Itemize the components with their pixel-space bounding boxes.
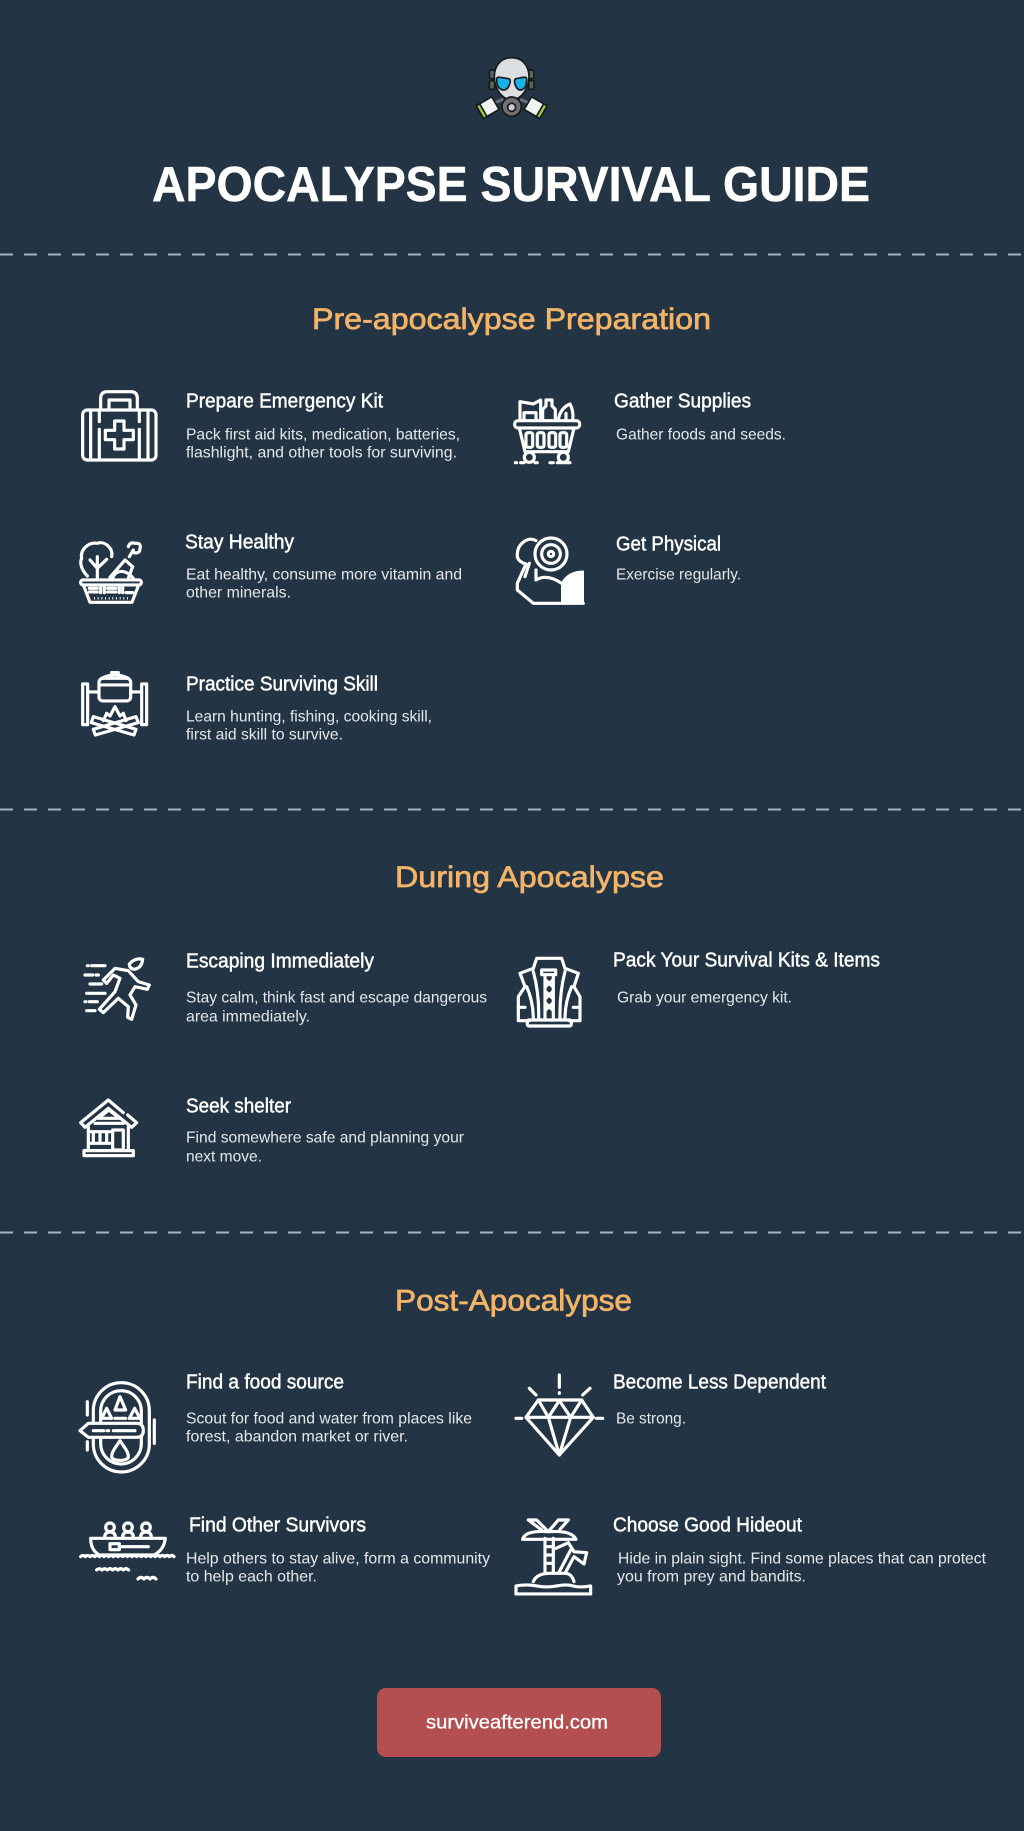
heading: Seek shelter bbox=[186, 1096, 291, 1118]
text: next move. bbox=[186, 1148, 262, 1166]
text bbox=[186, 990, 487, 1026]
icon: diamond bbox=[516, 1375, 603, 1455]
heading: Find a food source bbox=[186, 1372, 344, 1394]
text: Gather foods and seeds. bbox=[616, 426, 786, 444]
text: Eat healthy, consume more vitamin and bbox=[186, 566, 462, 584]
heading: Pack Your Survival Kits & Items bbox=[613, 950, 880, 972]
text bbox=[186, 566, 462, 602]
item: become less dependent bbox=[516, 1372, 826, 1455]
text: Grab your emergency kit. bbox=[617, 990, 792, 1006]
item: stay healthy bbox=[81, 532, 462, 602]
text: first aid skill to survive. bbox=[186, 726, 343, 744]
text: forest, abandon market or river. bbox=[186, 1428, 408, 1446]
icon: gas mask bbox=[476, 58, 547, 119]
panel: post-apocalypse bbox=[80, 1284, 987, 1594]
text: Help others to stay alive, form a community bbox=[186, 1550, 490, 1568]
panel: pre-apocalypse preparation bbox=[81, 303, 786, 744]
item: find a food source bbox=[80, 1372, 472, 1472]
icon: palm island bbox=[516, 1520, 591, 1594]
item: escaping immediately bbox=[85, 950, 487, 1026]
icon: boat with survivors bbox=[81, 1523, 174, 1579]
heading: Choose Good Hideout bbox=[613, 1514, 802, 1536]
panel: during apocalypse bbox=[81, 861, 880, 1166]
button: website link: surviveafterend.com bbox=[426, 1712, 608, 1734]
item: seek shelter bbox=[81, 1096, 464, 1166]
text: you from prey and bandits. bbox=[617, 1568, 806, 1586]
text: Be strong. bbox=[616, 1410, 686, 1428]
icon: first aid kit bbox=[83, 392, 156, 460]
section heading: Pre-apocalypse Preparation bbox=[312, 303, 711, 336]
heading: Practice Surviving Skill bbox=[186, 674, 378, 696]
text: Learn hunting, fishing, cooking skill, bbox=[186, 708, 432, 726]
item: practice surviving skill bbox=[83, 673, 432, 744]
section heading: Post-Apocalypse bbox=[395, 1284, 632, 1318]
heading: Prepare Emergency Kit bbox=[186, 390, 383, 412]
text: Stay calm, think fast and escape dangerous bbox=[186, 990, 487, 1006]
heading: Find Other Survivors bbox=[189, 1514, 366, 1536]
text: to help each other. bbox=[186, 1568, 317, 1586]
text bbox=[186, 1550, 490, 1586]
icon: shopping basket bbox=[515, 400, 580, 463]
section heading: During Apocalypse bbox=[395, 861, 664, 894]
item: choose good hideout bbox=[516, 1514, 987, 1594]
text bbox=[186, 708, 432, 744]
item: get physical bbox=[517, 534, 741, 604]
item: gather supplies bbox=[515, 390, 786, 463]
heading: Stay Healthy bbox=[185, 532, 294, 554]
text: Pack first aid kits, medication, batteries, bbox=[186, 426, 460, 444]
text: other minerals. bbox=[186, 584, 291, 602]
text: Hide in plain sight. Find some places that can protect bbox=[618, 1550, 987, 1568]
icon: survival jacket bbox=[518, 958, 580, 1026]
text: Exercise regularly. bbox=[616, 566, 741, 584]
text: Scout for food and water from places like bbox=[186, 1410, 472, 1428]
icon: vegetable basket bbox=[81, 543, 141, 602]
text: flashlight, and other tools for surviving. bbox=[186, 444, 457, 462]
icon: pot over campfire bbox=[83, 673, 147, 735]
text: Find somewhere safe and planning your bbox=[186, 1130, 464, 1146]
heading: Gather Supplies bbox=[614, 390, 751, 412]
text bbox=[186, 1410, 472, 1446]
heading: Become Less Dependent bbox=[613, 1372, 826, 1394]
item: prepare emergency kit bbox=[83, 390, 460, 462]
item: pack your survival kits bbox=[518, 950, 880, 1026]
text: area immediately. bbox=[186, 1008, 310, 1026]
icon: running person bbox=[85, 959, 149, 1019]
heading: Get Physical bbox=[616, 534, 721, 556]
title: APOCALYPSE SURVIVAL GUIDE bbox=[152, 158, 870, 212]
text bbox=[186, 1130, 464, 1166]
heading: Escaping Immediately bbox=[186, 950, 374, 972]
text bbox=[186, 426, 460, 462]
icon: house bbox=[81, 1100, 137, 1156]
text bbox=[617, 1550, 987, 1586]
item: find other survivors bbox=[81, 1514, 490, 1586]
icon: flexed arm with weight bbox=[517, 538, 584, 604]
icon: food can bbox=[80, 1383, 154, 1472]
button: website link bbox=[377, 1688, 661, 1757]
